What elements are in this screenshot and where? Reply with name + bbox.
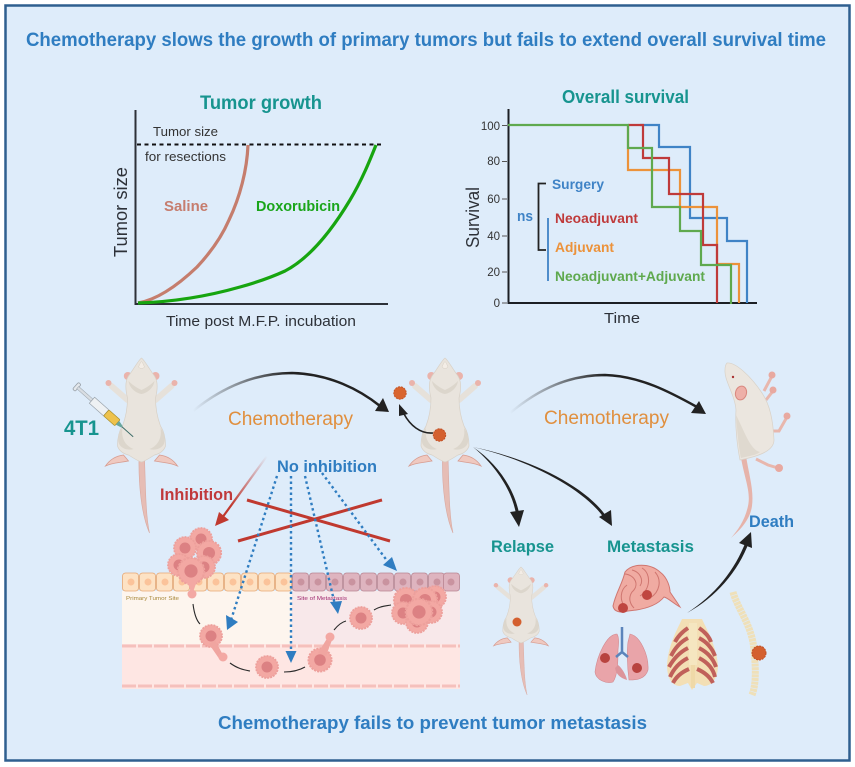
cell extravasation (308, 632, 334, 672)
panel: overall survival chart (463, 87, 757, 327)
tissue diagram (122, 528, 460, 689)
icon: resected tumor (394, 387, 406, 399)
icon: syringe (73, 382, 136, 440)
adjuvant legend: Adjuvant (555, 239, 614, 255)
metastatic cell row (292, 573, 460, 591)
threshold line (137, 144, 383, 146)
vessel walls (122, 646, 460, 686)
panel: tumor growth chart (111, 93, 388, 330)
threshold label line 2: for resections (145, 149, 227, 164)
primary site label: Primary Tumor Site (126, 596, 179, 602)
primary cell row (122, 573, 292, 591)
arrow: tumor resection (399, 404, 433, 433)
y ticks: 40 (487, 231, 500, 243)
x axis label: Time (604, 310, 640, 327)
icon: relapse tumor (512, 618, 522, 626)
circulating cell (256, 656, 278, 678)
neoadjuvant plus adjuvant curve (508, 125, 731, 304)
doxorubicin curve (138, 145, 376, 303)
icon: relapse mouse (494, 567, 548, 695)
icon: spine with tumor (733, 592, 766, 695)
icon: tumor bearing mouse (409, 358, 481, 533)
blood vessel (122, 644, 460, 689)
label: chemotherapy left: Chemotherapy (228, 409, 353, 430)
icon: intestine with tumors (613, 565, 680, 613)
title: Chemotherapy slows the growth of primary tumors but fails to extend overall survival time (26, 30, 826, 51)
arrow: first chemotherapy (193, 373, 389, 412)
y ticks: 20 (487, 267, 500, 279)
axes (136, 110, 388, 304)
primary tumor cluster (168, 528, 221, 598)
arrow: relapse (473, 447, 524, 527)
metastasis tissue (292, 591, 460, 644)
blue legend line (547, 218, 549, 281)
y ticks: 100 (481, 121, 500, 133)
primary cell nuclei (128, 578, 288, 586)
label: 4T1: 4T1 (64, 417, 99, 440)
label: chemotherapy right: Chemotherapy (544, 408, 669, 429)
icon: tumor on mouse (433, 429, 446, 441)
chart heading: Tumor growth (200, 93, 322, 114)
arrow: inhibition (215, 456, 267, 526)
y ticks (481, 121, 500, 310)
icon: dead rat (725, 363, 790, 538)
label: inhibition: Inhibition (160, 485, 233, 504)
surgery curve (640, 125, 747, 303)
label: no inhibition: No inhibition (277, 457, 377, 476)
legend bracket (538, 184, 546, 250)
label: death: Death (749, 512, 794, 531)
y ticks: 0 (494, 298, 500, 310)
ns label: ns (517, 208, 533, 225)
primary tumor tissue (122, 591, 292, 644)
y axis label: Tumor size (111, 167, 131, 257)
arrow: metastasis (473, 447, 612, 526)
neoadjuvant legend: Neoadjuvant (555, 210, 638, 226)
red cross (238, 500, 390, 541)
icon: injected mouse (106, 358, 178, 533)
adjuvant curve (628, 125, 739, 303)
arrow: second chemotherapy (510, 375, 706, 414)
saline curve (138, 145, 248, 303)
combination legend: Neoadjuvant+Adjuvant (555, 268, 705, 284)
y axis label: Survival (463, 187, 483, 248)
label: metastasis: Metastasis (607, 537, 694, 556)
label: relapse: Relapse (491, 537, 554, 556)
y ticks: 80 (487, 156, 500, 168)
x axis label: Time post M.F.P. incubation (166, 313, 356, 330)
chart heading: Overall survival (562, 87, 689, 107)
y tick marks (502, 126, 507, 303)
icon: lungs with tumors (595, 627, 648, 683)
metastasis site label: Site of Metastasis (297, 596, 347, 602)
migration arrows (193, 604, 391, 672)
icon: ribcage (667, 619, 718, 690)
neoadjuvant curve (628, 125, 717, 303)
metastatic cluster (392, 586, 446, 633)
threshold label: Tumor size (153, 124, 218, 139)
saline label: Saline (164, 198, 208, 215)
bottom conclusion: Chemotherapy fails to prevent tumor metastasis (218, 713, 647, 733)
cell intravasation (200, 625, 228, 662)
migrating cell (350, 607, 372, 629)
axes (508, 109, 757, 303)
dotted arrows: no inhibition (226, 473, 397, 663)
arrow: metastasis to death (687, 532, 752, 613)
y ticks: 60 (487, 194, 500, 206)
doxorubicin label: Doxorubicin (256, 198, 340, 215)
metastatic cell nuclei (298, 578, 454, 586)
surgery legend: Surgery (552, 176, 604, 192)
